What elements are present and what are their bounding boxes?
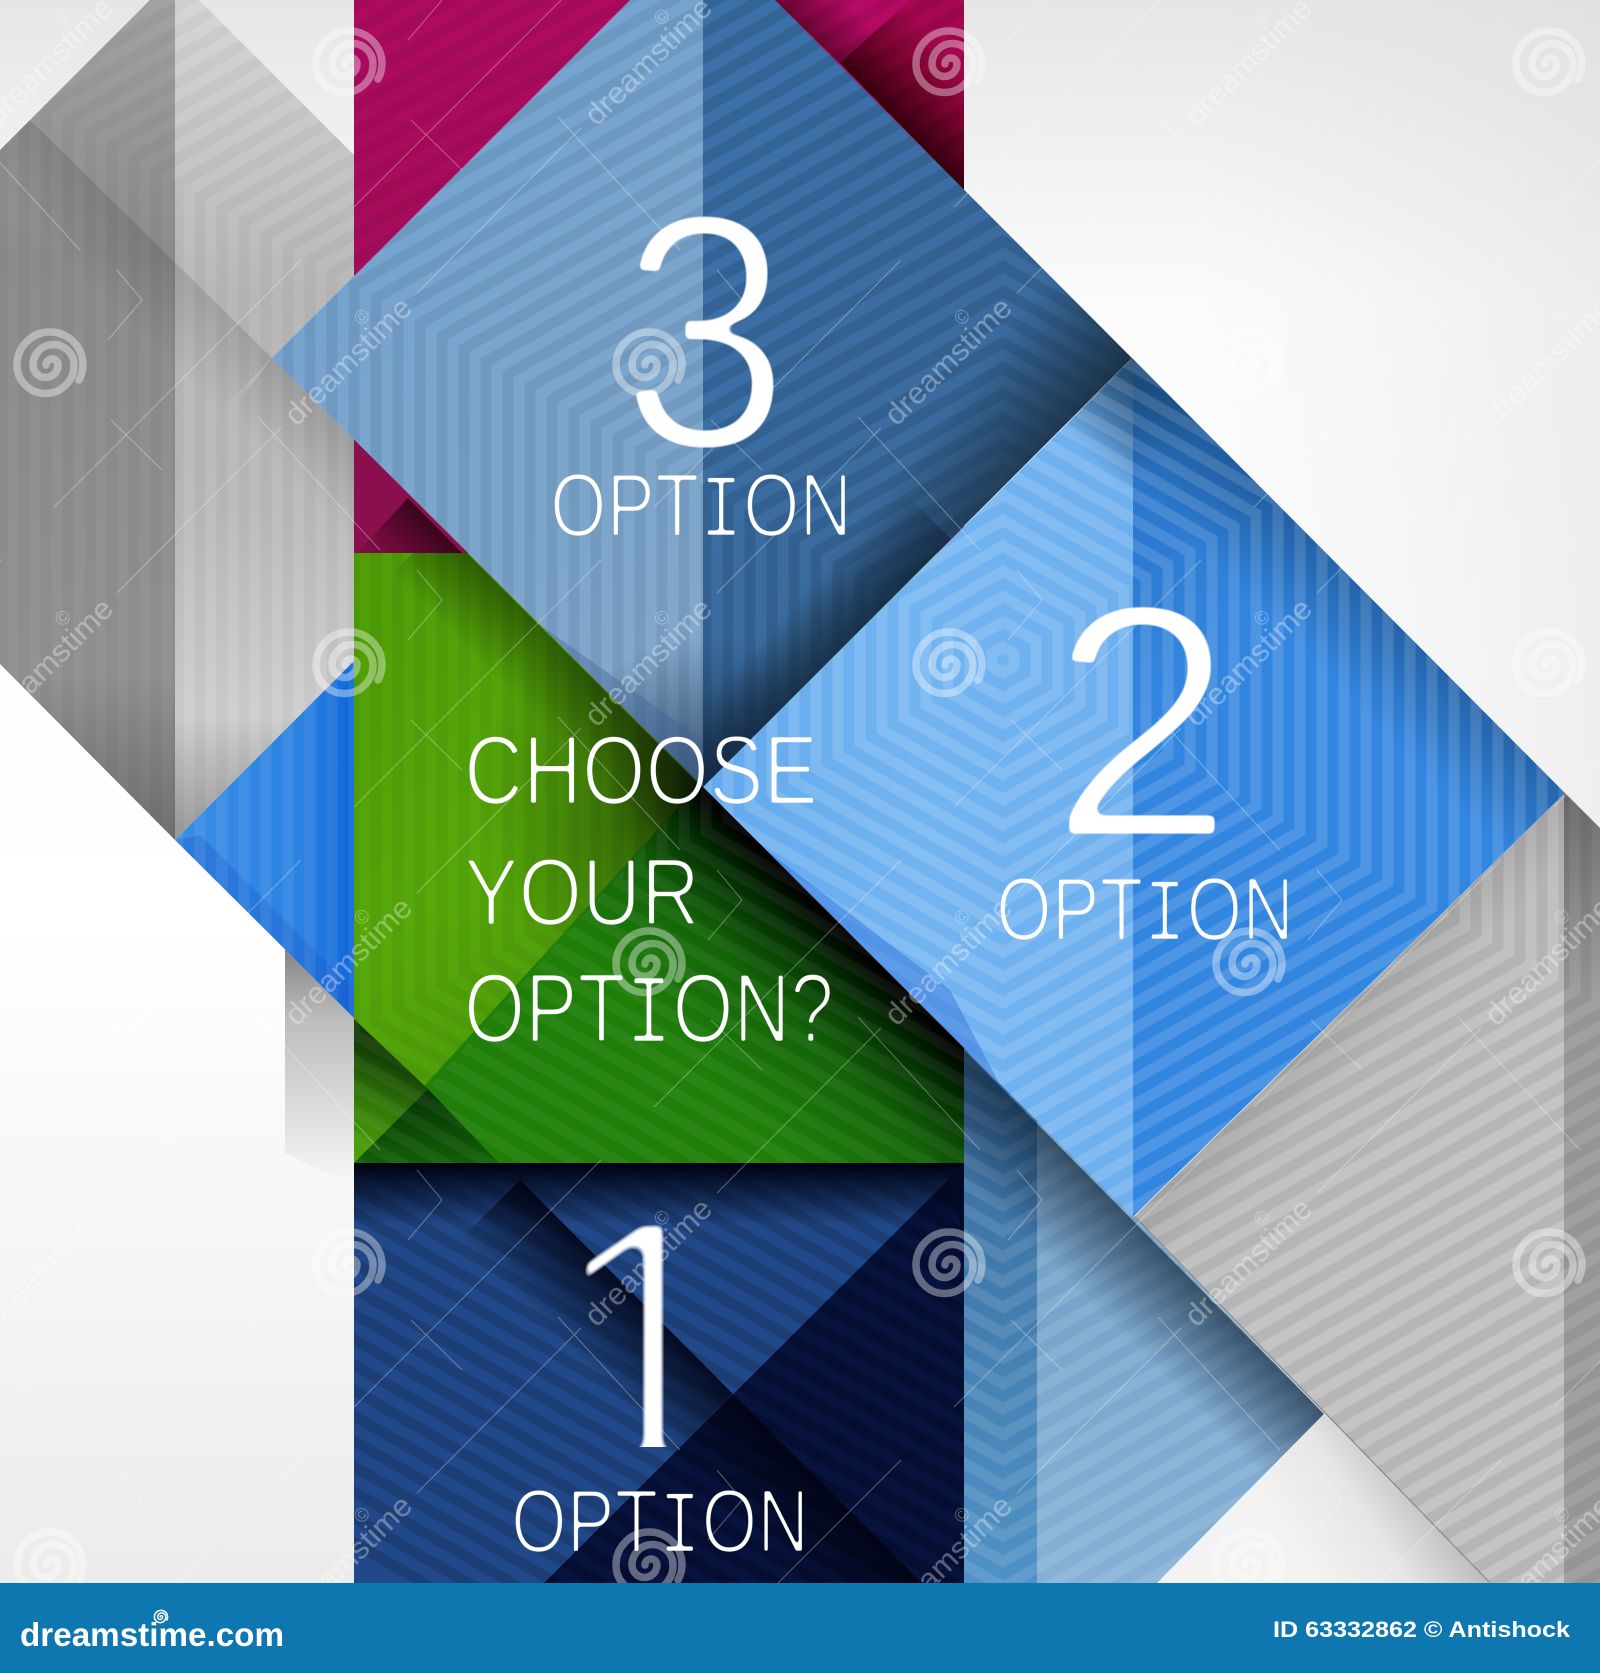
number 1: 1 [544, 1140, 749, 1552]
panel: small gray shadow strip [285, 948, 354, 1187]
panel: left gray folded shape [0, 0, 354, 840]
panel: magenta band [354, 0, 964, 553]
heading: choose your option [464, 715, 834, 1072]
footer credit: ID 63332862 © Antishock [1273, 1617, 1571, 1642]
footer logo: dreamstime.com [20, 1616, 284, 1653]
diamond 3 right face [703, 0, 1132, 787]
footer bar [0, 1583, 1600, 1673]
heading: choose your option: CHOOSE [464, 715, 818, 825]
option 1 label: OPTION [511, 1472, 809, 1580]
panel: gray lower right plate [1130, 790, 1600, 1583]
option 2 label: OPTION [996, 860, 1294, 968]
number 3: 3 [620, 144, 790, 520]
panel: navy square [354, 1163, 964, 1583]
diamond 2 right face [1133, 358, 1565, 1217]
green lower left triangles [354, 1019, 499, 1163]
panel: left blue triangle [175, 661, 354, 1018]
number 2: 2 [1049, 535, 1235, 908]
heading: choose your option: OPTION? [464, 953, 834, 1072]
diamond 3 left face [272, 0, 703, 787]
navy dark triangle [544, 1163, 964, 1583]
heading: choose your option: YOUR [464, 839, 700, 946]
magenta upper right fold [775, 0, 964, 190]
diamond 2 left face [703, 358, 1133, 1217]
panel: diamond 2 [703, 358, 1565, 1217]
option 3 label: OPTION [550, 456, 852, 564]
magenta lower triangle [354, 440, 470, 553]
panel: green square [320, 526, 964, 1163]
green dark fold [354, 780, 964, 1163]
panel: pale blue lower strip [964, 1048, 1324, 1583]
panel: white lower triangle [1157, 1414, 1489, 1583]
panel: diamond 3 [272, 0, 1132, 787]
